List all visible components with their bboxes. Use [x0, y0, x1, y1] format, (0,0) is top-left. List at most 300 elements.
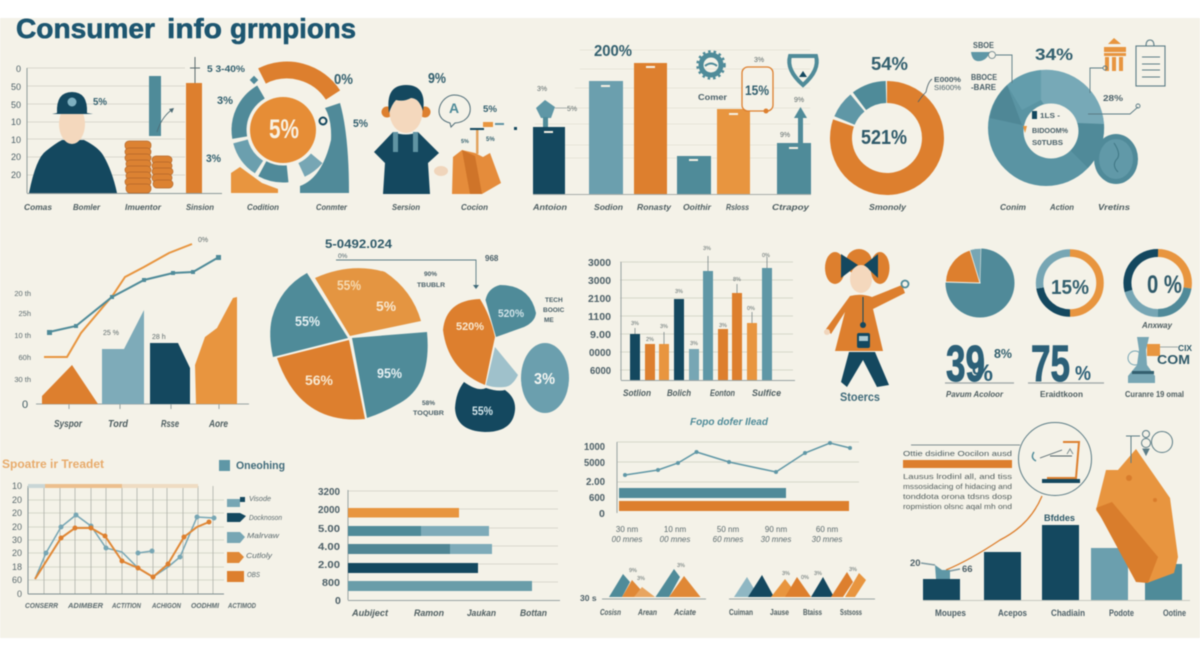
paragraph — [903, 474, 1013, 511]
horizontal x labels: Jaukan — [467, 608, 496, 618]
y axis labels: 1100 — [588, 312, 611, 323]
teal trend line — [47, 255, 221, 335]
doughnut 0% — [1127, 253, 1188, 330]
doughnut centre text: BIDOOM% — [1032, 126, 1068, 135]
doughnut labels: 28% — [1103, 93, 1124, 103]
horizontal x labels: Ramon — [414, 608, 444, 618]
paragraph: ropmistion olsnc aqal mh ond — [903, 504, 1012, 511]
panel: grouped column chart — [588, 246, 795, 398]
doughnut 0%: 0 % — [1147, 271, 1182, 299]
y axis labels: 6000 — [590, 366, 611, 377]
segment values — [456, 308, 555, 418]
orange series — [35, 520, 212, 580]
progress bars — [619, 488, 849, 511]
area axis labels: 30 th — [14, 375, 31, 384]
columns — [630, 268, 772, 380]
column value labels: 3% — [690, 341, 698, 347]
column category labels: Eonton — [710, 388, 735, 398]
y axis labels: 0 — [16, 64, 21, 74]
bar labels: Podote — [1109, 608, 1134, 619]
column category labels: Ronasty — [637, 202, 672, 212]
worker value labels: 5% — [483, 104, 498, 115]
trend y labels: 30 — [12, 535, 22, 545]
doughnut values: 54% — [871, 54, 908, 74]
panel: mountain chart left — [580, 563, 706, 617]
orange segment — [443, 299, 495, 385]
ring value labels: 5% — [353, 118, 368, 130]
category labels row one left: Conmter — [316, 202, 348, 212]
x labels: 10 nm — [664, 525, 686, 534]
pie annotations: 0% — [338, 253, 348, 260]
segment values: 520% — [498, 308, 524, 320]
doughnut 15%: 15% — [1051, 277, 1089, 299]
y axis labels: 20 — [11, 152, 21, 162]
value labels: 5 3-40% — [207, 64, 245, 74]
girl caption: Stoercs — [840, 392, 880, 404]
area category labels: Tord — [108, 419, 129, 430]
panel: exploded pie chart — [270, 237, 565, 419]
x labels: 30 mnes — [812, 535, 842, 544]
error whiskers — [635, 256, 767, 344]
y labels: 2.00 — [586, 476, 605, 488]
horizontal y labels: 5.00 — [318, 523, 340, 535]
mountain categories: Btaiss — [803, 608, 822, 617]
y labels — [584, 441, 605, 520]
trend y labels: 18 — [12, 562, 22, 572]
doughnut labels: 34% — [1035, 45, 1073, 64]
area shapes — [42, 297, 237, 404]
column value labels: 0% — [762, 253, 770, 259]
y axis labels: 50 — [11, 100, 21, 110]
top band — [28, 484, 198, 488]
doughnut category labels: Conim — [1000, 202, 1026, 212]
title: Consumer — [16, 13, 155, 44]
panel: line and progress chart — [584, 417, 859, 544]
column category labels: Bolich — [667, 388, 691, 398]
title: grmpions — [230, 13, 356, 44]
trend legend — [227, 496, 282, 582]
mountain axis label: 30 s — [580, 593, 597, 603]
y axis labels: 3000 — [588, 258, 611, 269]
horizontal y labels: 0 — [335, 595, 341, 607]
bars — [533, 63, 811, 194]
icon: worker figure — [374, 85, 448, 194]
paragraph: Lausus lrodinl all, and tiss — [903, 474, 1013, 481]
ring value labels — [217, 71, 368, 130]
stat 39%: 39 — [946, 335, 985, 392]
doughnut category labels: Action — [1049, 202, 1074, 212]
side disc — [1094, 134, 1138, 184]
trend x labels: OODHMI — [191, 603, 220, 610]
paragraph: mssosidacing of hidacing and — [903, 484, 1012, 491]
chart heading: Fopo dofer Ilead — [690, 417, 769, 428]
pie slices — [270, 268, 428, 419]
pie annotations: TECH — [545, 297, 563, 304]
area value labels: 28 h — [152, 334, 166, 341]
mountain labels: 3% — [677, 563, 685, 569]
mountain categories: Sstsoss — [840, 608, 862, 617]
panel: text block — [903, 445, 1020, 511]
horizontal x labels — [351, 608, 547, 618]
mountain labels: 3% — [637, 576, 645, 582]
y axis labels: 2100 — [588, 294, 611, 305]
category labels row one left: Sinsion — [186, 202, 214, 212]
doughnut centre text — [1023, 111, 1068, 147]
horizontal bars — [348, 508, 532, 591]
x labels: 30 nm — [616, 525, 638, 534]
trend x labels: ACTITION — [111, 603, 142, 610]
mountain categories: Cuiman — [729, 608, 753, 617]
panel: mountain chart right — [729, 567, 875, 617]
mountain categories: Cosisn — [600, 608, 621, 617]
area axis labels: 25h — [18, 309, 31, 318]
trend x labels: ACTIMOD — [227, 603, 256, 610]
centre disc — [250, 97, 316, 163]
pie annotations: BOOIC — [543, 307, 565, 314]
area axis labels — [14, 289, 31, 384]
mountain labels — [629, 563, 685, 582]
doughnut body — [988, 70, 1104, 186]
mountain labels: 0% — [801, 575, 809, 581]
trend y labels: 20 — [12, 522, 22, 532]
arrow connector — [336, 260, 479, 289]
area axis labels: 10 th — [14, 331, 31, 340]
icon: vase with COM — [1125, 337, 1192, 399]
trend y labels — [12, 481, 22, 599]
column value labels: 3% — [719, 323, 727, 329]
icon: shield ring — [789, 56, 817, 85]
small sign — [470, 122, 517, 130]
column value labels: 5% — [567, 106, 577, 113]
doughnut 0%: Anxway — [1141, 320, 1173, 330]
title: info — [167, 13, 222, 44]
panel: worker with box — [374, 70, 517, 194]
y axis labels: 3000 — [588, 276, 611, 287]
pie annotations: 968 — [485, 254, 499, 263]
y axis labels — [11, 64, 21, 180]
doughnut category labels — [1000, 202, 1130, 212]
worker value labels: 5% — [486, 137, 495, 143]
horizontal x labels: Aubiject — [351, 608, 389, 618]
column value labels: 9% — [780, 132, 790, 139]
orange leader line — [946, 496, 1042, 570]
trend x labels: CONSERR — [25, 603, 58, 610]
pie annotations: TOQUBR — [413, 410, 444, 417]
stat 39%: % — [972, 360, 993, 387]
bar labels: 20 — [910, 558, 921, 569]
side ellipse — [521, 343, 569, 413]
panel: trend line chart — [12, 481, 256, 610]
column category labels — [532, 202, 810, 212]
pie annotations: ME — [544, 317, 554, 324]
doughnut labels: BBOCE — [971, 73, 998, 82]
area axis labels: 20 th — [14, 289, 31, 298]
panel: segmented ring chart — [217, 70, 368, 193]
doughnut 15% — [1040, 253, 1100, 313]
decorative markers — [250, 76, 326, 124]
y labels: 600 — [589, 492, 605, 504]
column value labels: 3% — [660, 324, 668, 330]
icon: girl figure — [824, 249, 908, 387]
doughnut category labels: Vretins — [1098, 202, 1130, 212]
callout: 15% box — [742, 67, 773, 114]
teal side block — [300, 103, 349, 193]
ring value labels: 0% — [334, 71, 353, 88]
speech bubble — [439, 95, 470, 127]
y axis labels: 10 — [11, 135, 21, 145]
doughnut callout — [918, 75, 961, 102]
area zero tick: 0 — [22, 399, 28, 411]
trend y labels: 20 — [12, 495, 22, 505]
column category labels: Sotlion — [623, 388, 651, 398]
arrow up — [794, 107, 807, 143]
column category labels: Ooithir — [683, 202, 712, 212]
panel: blob segment chart — [443, 285, 569, 432]
panel: text block: Ottie dsidine Oocilon ausd — [903, 449, 1012, 458]
teal series — [35, 512, 216, 579]
y labels: 5000 — [584, 457, 605, 469]
x labels: 00 mnes — [612, 535, 642, 544]
icon: clipboard — [1136, 40, 1165, 86]
column value labels: 3% — [537, 86, 547, 93]
mountain labels: 3% — [849, 567, 857, 573]
trend y labels: 0 — [17, 589, 22, 599]
callout circle with machine icon — [1018, 422, 1092, 496]
panel: horizontal bar chart — [318, 486, 560, 618]
speech bubble: A — [449, 100, 459, 116]
worker value labels: 5% — [461, 139, 469, 145]
trend legend: Cutloly — [246, 553, 273, 560]
value labels — [93, 64, 245, 165]
stat 39%: 8% — [994, 346, 1012, 361]
column category labels: Rsloss — [726, 202, 749, 212]
area category labels: Rsse — [161, 419, 179, 430]
mountain labels — [782, 567, 857, 581]
column value labels: 3% — [631, 321, 639, 327]
segment values: 520% — [456, 321, 484, 333]
bar labels: 66 — [962, 564, 973, 575]
doughnut centre text: S0TUBS — [1032, 138, 1063, 147]
worker value labels — [428, 70, 498, 145]
mountain labels: 9% — [629, 568, 637, 574]
panel: column chart top centre — [532, 43, 817, 212]
x labels — [612, 525, 842, 544]
area category labels: Aore — [208, 419, 228, 430]
trend legend: Visode — [249, 496, 271, 503]
stat 75%: % — [1075, 363, 1091, 385]
category labels row one left: Comas — [24, 202, 52, 212]
area value labels: 25 % — [103, 330, 119, 337]
doughnut arcs — [841, 92, 933, 184]
centre value: 5% — [269, 114, 299, 144]
trend x labels: ACHIGON — [151, 603, 182, 610]
category labels row one left: Bomler — [73, 202, 101, 212]
column value labels — [537, 43, 804, 139]
y axis labels — [588, 258, 611, 377]
stat 75%: Eraidtkoon — [1040, 389, 1083, 399]
pie annotations: TBUBLR — [417, 282, 445, 289]
stat 39%: Pavum Acoloor — [946, 389, 1004, 399]
category labels row one left: Cocion — [461, 202, 488, 212]
x labels: 30 mnes — [761, 535, 791, 544]
y axis labels: 10 — [11, 117, 21, 127]
y labels: 1000 — [584, 441, 605, 453]
bar labels: Acepos — [998, 608, 1027, 619]
pie values: 5% — [376, 298, 397, 314]
area category labels: Syspor — [54, 419, 83, 430]
mountain labels: 3% — [814, 571, 822, 577]
icon: cardboard box — [452, 130, 501, 194]
panel: spoatre trend heading: Spoatre ir Treadet — [2, 459, 104, 471]
orange trend line — [44, 244, 192, 357]
triangles — [734, 572, 866, 597]
column value labels — [631, 246, 770, 347]
column value labels: 0% — [747, 306, 755, 312]
small funnel icon — [921, 563, 960, 579]
ring arcs — [239, 70, 333, 174]
icon: small bird — [971, 52, 996, 61]
column value labels: 8% — [733, 277, 741, 283]
pie values: 55% — [295, 313, 320, 329]
connector lines — [996, 55, 1140, 114]
panel: person and coins bar chart — [11, 57, 245, 194]
ring value labels: 3% — [217, 95, 233, 107]
column category labels — [623, 388, 781, 398]
mountain labels: 3% — [782, 571, 790, 577]
mountain categories: Aciate — [673, 608, 697, 617]
column category labels: Ctrapoy — [772, 202, 810, 212]
mountain categories: Jause — [770, 608, 789, 617]
y axis labels: 0000 — [589, 348, 611, 359]
title — [16, 13, 356, 44]
icon: rings and person — [1126, 430, 1172, 463]
bar labels: Bfddes — [1044, 513, 1075, 524]
panel: area and line chart — [14, 237, 249, 430]
column value labels: 3% — [703, 246, 711, 252]
doughnut labels — [971, 41, 1124, 103]
pie chart small — [946, 248, 1014, 318]
x labels: 00 mnes — [660, 535, 690, 544]
area value labels: 0% — [198, 237, 208, 244]
icon: gem on stem — [536, 100, 567, 127]
dark segment — [455, 382, 515, 432]
trend x labels — [25, 603, 256, 610]
bar labels — [910, 513, 1186, 619]
column value labels: 200% — [594, 43, 632, 60]
segment values: 3% — [534, 371, 555, 388]
icon: virus cog — [698, 52, 724, 78]
doughnut centre text: 1LS - — [1040, 111, 1061, 120]
panel: large teal doughnut — [971, 38, 1165, 212]
paragraph: tonddota orona tdsns dosp — [903, 494, 1012, 501]
x labels: 50 nm — [717, 525, 739, 534]
pie values: 95% — [377, 365, 402, 381]
column category labels: Sodion — [594, 202, 623, 212]
icon: orange cheese block — [1096, 449, 1178, 583]
category labels row one left — [24, 202, 488, 212]
bar labels: Ootine — [1163, 608, 1186, 619]
stat 75%: 75 — [1031, 335, 1070, 392]
panel: bottom-right bar chart — [910, 513, 1190, 619]
trend y labels: 20 — [12, 548, 22, 558]
mountain categories — [729, 608, 862, 617]
doughnut values: 521% — [861, 127, 907, 149]
y axis labels: 9.00 — [590, 330, 611, 341]
category labels row one left: Imuentor — [125, 202, 162, 212]
area axis labels: 60h — [18, 353, 31, 362]
doughnut callout: SI600% — [934, 83, 961, 92]
column category labels: Antoion — [532, 202, 567, 212]
category labels row one left: Sersion — [392, 202, 420, 212]
trend y labels: 10 — [12, 481, 22, 491]
doughnut labels: -BARE — [971, 83, 997, 92]
category labels row one left: Codition — [247, 202, 279, 212]
horizontal y labels: 800 — [322, 577, 340, 589]
icon: vase with COM: CIX — [1178, 343, 1192, 353]
column value labels: 3% — [675, 289, 683, 295]
callout: 15% box: 15% — [745, 83, 769, 98]
trend x labels: ADIMBER — [67, 603, 103, 610]
column value labels: 9% — [794, 97, 804, 104]
column value labels: Comer — [698, 93, 727, 102]
y axis labels: 20 — [11, 170, 21, 180]
horizontal x labels: Bottan — [520, 608, 547, 618]
doughnut labels: SBOE — [973, 41, 995, 50]
icon: coin stacks — [125, 141, 173, 193]
x labels: 90 nm — [765, 525, 787, 534]
x labels: 60 nm — [816, 525, 838, 534]
horizontal y labels: 2000 — [318, 504, 340, 516]
bar labels: Moupes — [935, 608, 966, 619]
column category labels: Sulfice — [752, 388, 781, 398]
column value labels: 3% — [754, 57, 764, 64]
horizontal y labels: 2.00 — [318, 559, 340, 571]
trend legend: Malrvaw — [247, 533, 280, 540]
bars — [923, 525, 1182, 600]
value labels: 3% — [206, 153, 221, 165]
doughnut values — [861, 54, 908, 149]
x labels: 60 mnes — [713, 535, 743, 544]
value labels: 5% — [93, 97, 107, 108]
y labels: 0 — [599, 508, 605, 520]
icon: person with helmet — [29, 92, 117, 193]
pie annotations: 58% — [422, 400, 435, 407]
pie values: 55% — [337, 277, 361, 293]
teal segment — [486, 285, 536, 337]
trend y labels: 20 — [12, 508, 22, 518]
horizontal y labels: 4.00 — [318, 541, 340, 553]
legend header: Oneohing — [236, 460, 285, 472]
icon: temple — [1104, 38, 1126, 71]
pie values: 56% — [305, 372, 334, 388]
panel: orange doughnut 521% — [841, 54, 961, 212]
bar labels: Chadiain — [1051, 608, 1085, 619]
segment values: 55% — [472, 404, 493, 418]
light segment — [486, 347, 518, 387]
horizontal y labels — [318, 486, 341, 607]
mountain categories — [600, 608, 697, 617]
stat 75% — [1028, 335, 1104, 399]
y axis labels: 50 — [11, 82, 21, 92]
area value labels — [103, 237, 208, 341]
pie values — [295, 277, 402, 388]
orange bar — [186, 57, 202, 193]
pie annotations: 90% — [424, 271, 437, 278]
teal panel with arrow — [149, 76, 174, 136]
triangles — [609, 569, 700, 597]
doughnut callout: E000% — [934, 75, 961, 84]
icon: vase with COM: COM — [1157, 352, 1190, 367]
